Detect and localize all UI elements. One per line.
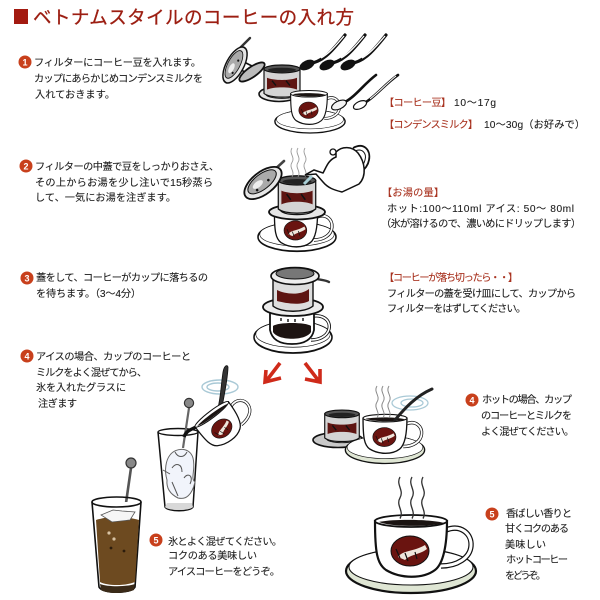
step 5 hot text: ホットコーヒー [506,554,568,566]
icon: cup on saucer [275,90,345,133]
step 5 hot text: をどうぞ。 [505,570,546,582]
icon: water stream [304,176,312,184]
icon: kettle [305,146,369,192]
note: amounts of beans and milk: 10〜30g（お好みで） [484,118,585,131]
note: after dripping [384,271,576,315]
icon: tilted cup with spoon [193,366,259,453]
note: amount of hot water: ホット:100〜110ml アイス: 50〜 80ml [387,203,574,215]
icon: steam [291,148,306,177]
note: after dripping: 【コーヒーが落ち切ったら・・】 [384,271,518,284]
note: amounts of beans and milk: 【コンデンスミルク】 [384,118,478,131]
step 5 iced text [150,534,282,578]
arrow: to iced route [265,363,281,382]
step 4 hot text [466,393,574,438]
note: amount of hot water [381,186,581,230]
step 4 iced text: 氷を入れたグラスに [36,381,126,394]
step 1 text: フィルターにコーヒー豆を入れます。 [34,57,201,69]
icon: filter on saucer [259,65,300,102]
step 5 iced text: コクのある美味しい [168,549,257,562]
step 4 hot text: ホットの場合、カップ [482,393,573,406]
step 5 iced text: 5 [153,536,159,546]
arrow: to hot route [305,363,320,382]
icon: lid held open [239,161,287,205]
icon: stirrer [125,458,136,510]
title: ベトナムスタイルのコーヒーの入れ方 [33,7,354,28]
note: after dripping: フィルターをはずしてください。 [387,303,526,315]
icon: steam [376,386,390,418]
step 5 hot text: 5 [489,510,495,520]
step 2 text [20,160,219,204]
icon: cup on saucer [345,414,425,464]
note: after dripping: フィルターの蓋を受け皿にして、カップから [387,288,576,300]
illustration: hot coffee cup [346,477,476,593]
step 5 hot text [486,508,572,582]
step 1 text: 1 [22,58,28,68]
icon: spoon [395,389,432,420]
step 3 text [20,271,208,300]
step 4 iced text: アイスの場合、カップのコーヒーと [36,350,191,363]
icon: cup [375,515,471,577]
note: amounts of beans and milk [384,97,585,131]
illustration: step 2 pouring hot water [239,146,369,251]
icon: stirrer in glass [183,398,194,448]
icon: glass with ice [158,428,198,511]
icon: blue swirl [392,396,428,410]
step 4 iced text: ミルクをよく混ぜてから、 [36,367,147,379]
step 4 hot text: のコーヒーとミルクを [481,410,572,422]
icon: big saucer and cup [258,207,336,251]
icon: filter on saucer [313,410,363,448]
illustration: pouring coffee over ice [158,366,259,511]
icon: measuring spoons of coffee [298,35,386,73]
icon: saucer and glass cup with coffee [254,312,332,353]
note: amounts of beans and milk: 10〜17g [454,98,496,109]
step 4 hot text: よく混ぜてください。 [481,426,574,438]
step 1 text [18,56,203,101]
illustration: iced coffee glass [92,458,141,593]
note: amount of hot water: 【お湯の量】 [382,186,444,199]
step 2 text: して、一気にお湯を注ぎます。 [35,191,176,204]
step 2 text: 2 [23,162,29,172]
step 4 iced text: 4 [24,352,30,362]
step 5 iced text: アイスコーヒーをどうぞ。 [168,566,280,578]
icon: coffee stream [184,427,196,437]
icon: blue swirl [202,380,238,394]
step 1 text: カップにあらかじめコンデンスミルクを [34,72,203,85]
icon: steam [399,477,424,519]
illustration: step 3 dripping [254,268,332,353]
step 3 text: 蓋をして、コーヒーがカップに落ちるの [36,271,208,284]
step 3 text: 3 [24,274,30,284]
step 5 hot text: 甘くコクのある [505,522,569,535]
step 5 iced text: 氷とよく混ぜてください。 [168,535,282,548]
note: amount of hot water: （氷が溶けるので、濃いめにドリップします） [381,217,581,230]
illustration: hot route, stirring [313,386,432,464]
icon: filter with saucer [269,176,325,220]
icon: saucer [346,549,476,593]
icon: milk spoons [330,75,398,112]
step 1 text: 入れておきます。 [35,89,115,101]
icon: filter lid and press [218,38,267,87]
step 4 hot text: 4 [469,396,475,406]
icon: glass of coffee [92,497,141,593]
step 4 iced text: 注ぎます [38,397,77,410]
step 5 hot text: 美味しい [505,538,546,551]
icon: filter on saucer with lid [263,268,329,316]
step 5 hot text: 香ばしい香りと [506,508,572,520]
step 4 iced text [20,350,191,410]
step 3 text: を待ちます。（3〜4分） [36,287,141,300]
note: amounts of beans and milk: 【コーヒー豆】 [384,97,451,109]
step 2 text: フィルターの中蓋で豆をしっかりおさえ、 [35,160,219,173]
illustration: step 1 filter, cup and spoons [218,35,398,133]
step 2 text: その上からお湯を少し注いで15秒蒸ら [35,176,213,189]
